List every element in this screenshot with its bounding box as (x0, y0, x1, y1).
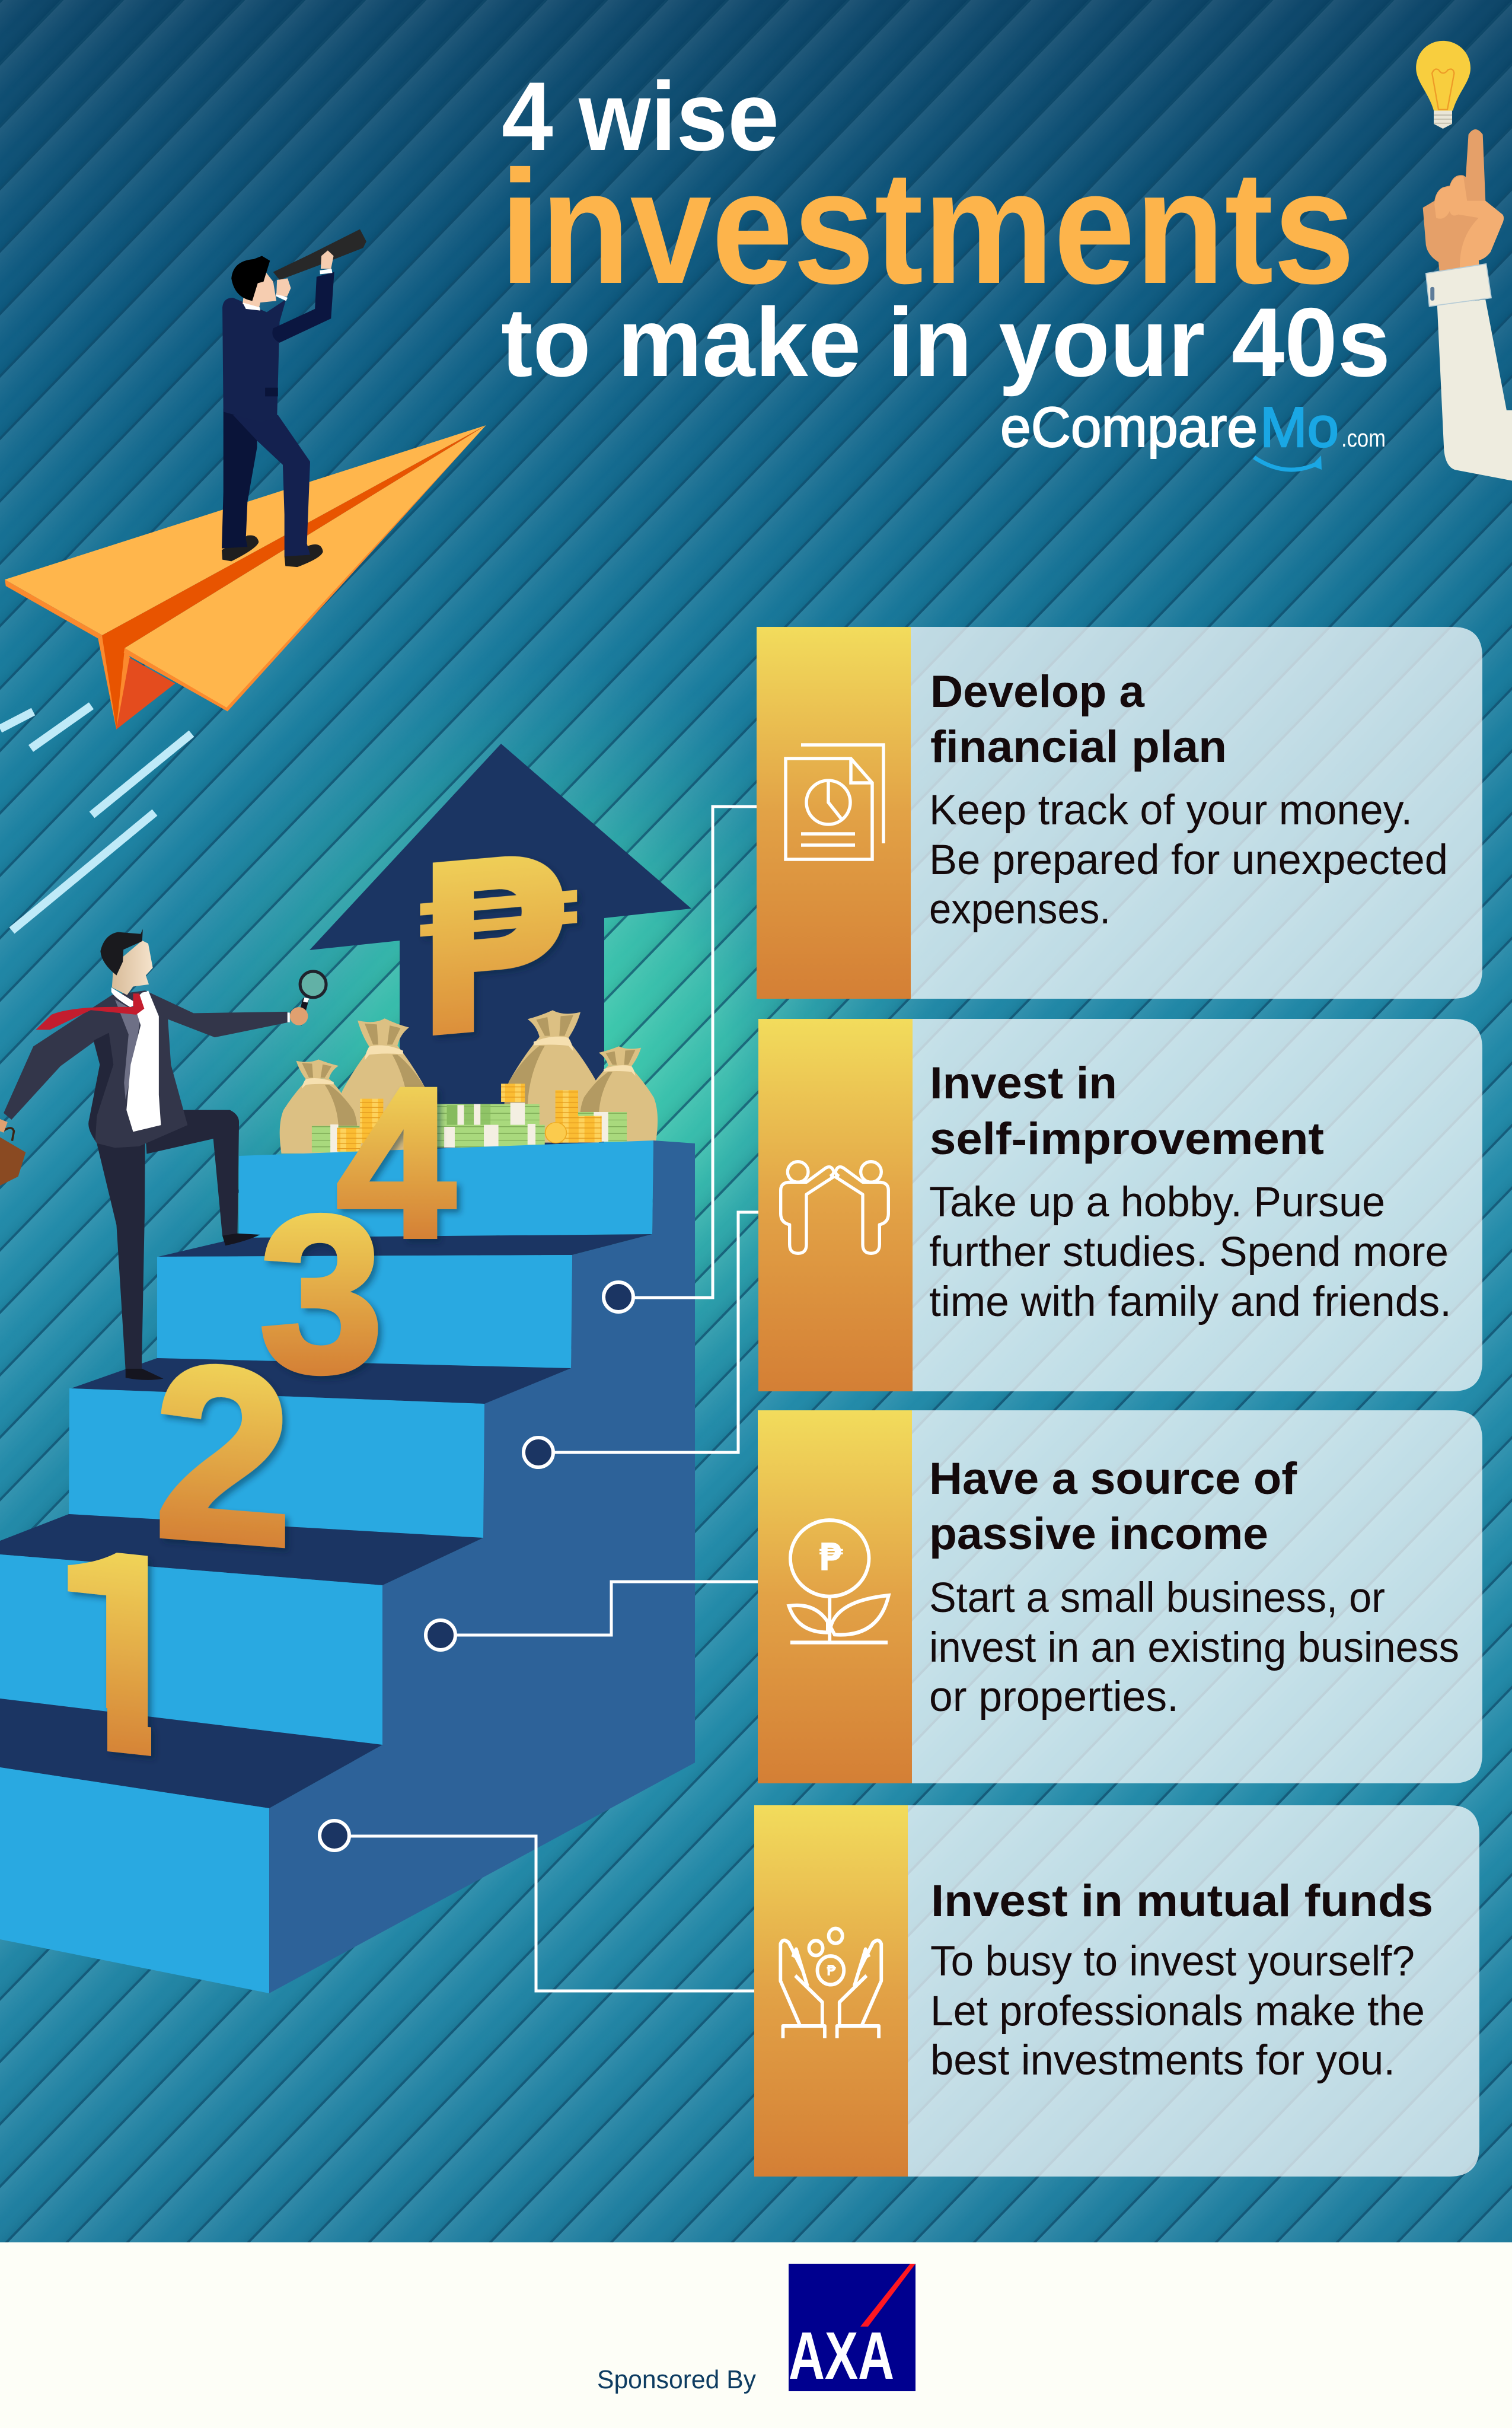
connector 1 (604, 807, 757, 1312)
base step front (0, 1767, 269, 1993)
body text: expenses. (929, 886, 1111, 933)
body text: further studies. Spend more (929, 1229, 1449, 1276)
logo: eCompareMo.com: Mo (1260, 396, 1339, 459)
icon: light bulb and pointing hand (1416, 41, 1512, 480)
panel: develop a financial plan (757, 627, 1482, 999)
suit jacket (4, 990, 289, 1148)
title line: investments: investments (500, 137, 1355, 317)
stair side wall (269, 1140, 695, 1993)
paper plane (5, 425, 486, 729)
body text: To busy to invest yourself? (930, 1938, 1415, 1985)
heading: Invest in mutual funds (931, 1876, 1433, 1926)
hand with case (0, 1119, 8, 1133)
icon: hands holding coins: ₱ (827, 1962, 836, 1979)
panel: invest in self-improvement (758, 1019, 1482, 1391)
logo: eCompareMo.com: .com (1341, 424, 1386, 452)
body text: Be prepared for unexpected (929, 837, 1448, 884)
title line: to make in your 40s: to make in your 40s (501, 288, 1390, 397)
legs (97, 1131, 145, 1374)
panel: invest in mutual funds (754, 1805, 1479, 2177)
money bags and cash (280, 1010, 658, 1154)
man with telescope (222, 230, 366, 567)
icon: two people forming a roof (781, 1162, 888, 1253)
panel: have a source of passive income (758, 1410, 1482, 1783)
logo: AXA: AXA (789, 2318, 894, 2393)
icon: light bulb (1416, 41, 1470, 129)
title (500, 62, 1390, 397)
icon: plant with peso coin (789, 1520, 889, 1643)
bank notes (312, 1103, 627, 1152)
icon: document with pie chart (786, 745, 883, 859)
body text: Start a small business, or (929, 1575, 1385, 1621)
body text (930, 1938, 1425, 2084)
coin stacks (337, 1084, 602, 1152)
vest (115, 999, 141, 1100)
connector 2 (524, 1212, 758, 1467)
speed lines (0, 706, 192, 931)
magnifier (288, 971, 326, 1025)
peso symbol: ₱ (412, 802, 579, 1094)
money bags (280, 1010, 658, 1154)
heading: Have a source of (929, 1454, 1297, 1504)
icon: plant with peso coin: ₱ (818, 1535, 843, 1580)
man climbing stairs (0, 929, 326, 1380)
heading: passive income (929, 1509, 1268, 1559)
body text: Let professionals make the (930, 1988, 1425, 2035)
numeral 2: 2 (154, 1311, 292, 1598)
head (112, 941, 153, 995)
body text: Take up a hobby. Pursue (929, 1179, 1385, 1226)
up arrow (310, 744, 691, 1151)
body text: time with family and friends. (929, 1279, 1452, 1325)
tread 3 (158, 1234, 652, 1257)
heading (930, 667, 1227, 772)
staircase (0, 1140, 695, 1993)
body text (929, 1179, 1452, 1325)
cuff (1426, 264, 1491, 307)
body text: or properties. (929, 1674, 1179, 1720)
icon: hands holding coins (780, 1929, 881, 2038)
title line: 4 wise: 4 wise (502, 62, 779, 171)
step 3 front (157, 1255, 572, 1368)
connector 3 (426, 1582, 758, 1650)
heading (930, 1058, 1324, 1164)
step 4 front (239, 1140, 653, 1238)
arm sleeve (1437, 299, 1512, 480)
heading: Invest in (930, 1058, 1117, 1108)
footer band (0, 2242, 1512, 2428)
heading: financial plan (930, 722, 1227, 772)
heading: Develop a (930, 667, 1145, 717)
heading: self-improvement (930, 1114, 1324, 1164)
numeral 4: 4 (337, 1044, 456, 1281)
body text (929, 1575, 1459, 1720)
step 1 front (0, 1554, 382, 1745)
body text: Keep track of your money. (929, 787, 1412, 834)
briefcase (0, 1137, 25, 1186)
sponsored by label: Sponsored By (597, 2365, 756, 2394)
paper plane with man and telescope (5, 230, 486, 729)
heading (929, 1454, 1297, 1559)
numeral 3: 3 (260, 1170, 383, 1418)
shirt (126, 990, 161, 1132)
tie (36, 993, 144, 1030)
tread 0 (0, 1699, 382, 1808)
body text: invest in an existing business (929, 1624, 1459, 1671)
body text: best investments for you. (930, 2037, 1395, 2084)
logo: AXA (789, 2264, 916, 2393)
tread 2 (71, 1358, 571, 1404)
connector 4 (320, 1821, 754, 1991)
step 2 front (69, 1388, 484, 1538)
shoes (126, 1234, 260, 1380)
logo: eCompareMo.com (1000, 396, 1386, 470)
body text (929, 787, 1448, 933)
numeral 1: 1 (37, 1420, 205, 1849)
hand (1423, 129, 1504, 272)
logo: eCompareMo.com: eCompare (1000, 396, 1258, 459)
tread 1 (0, 1514, 483, 1585)
